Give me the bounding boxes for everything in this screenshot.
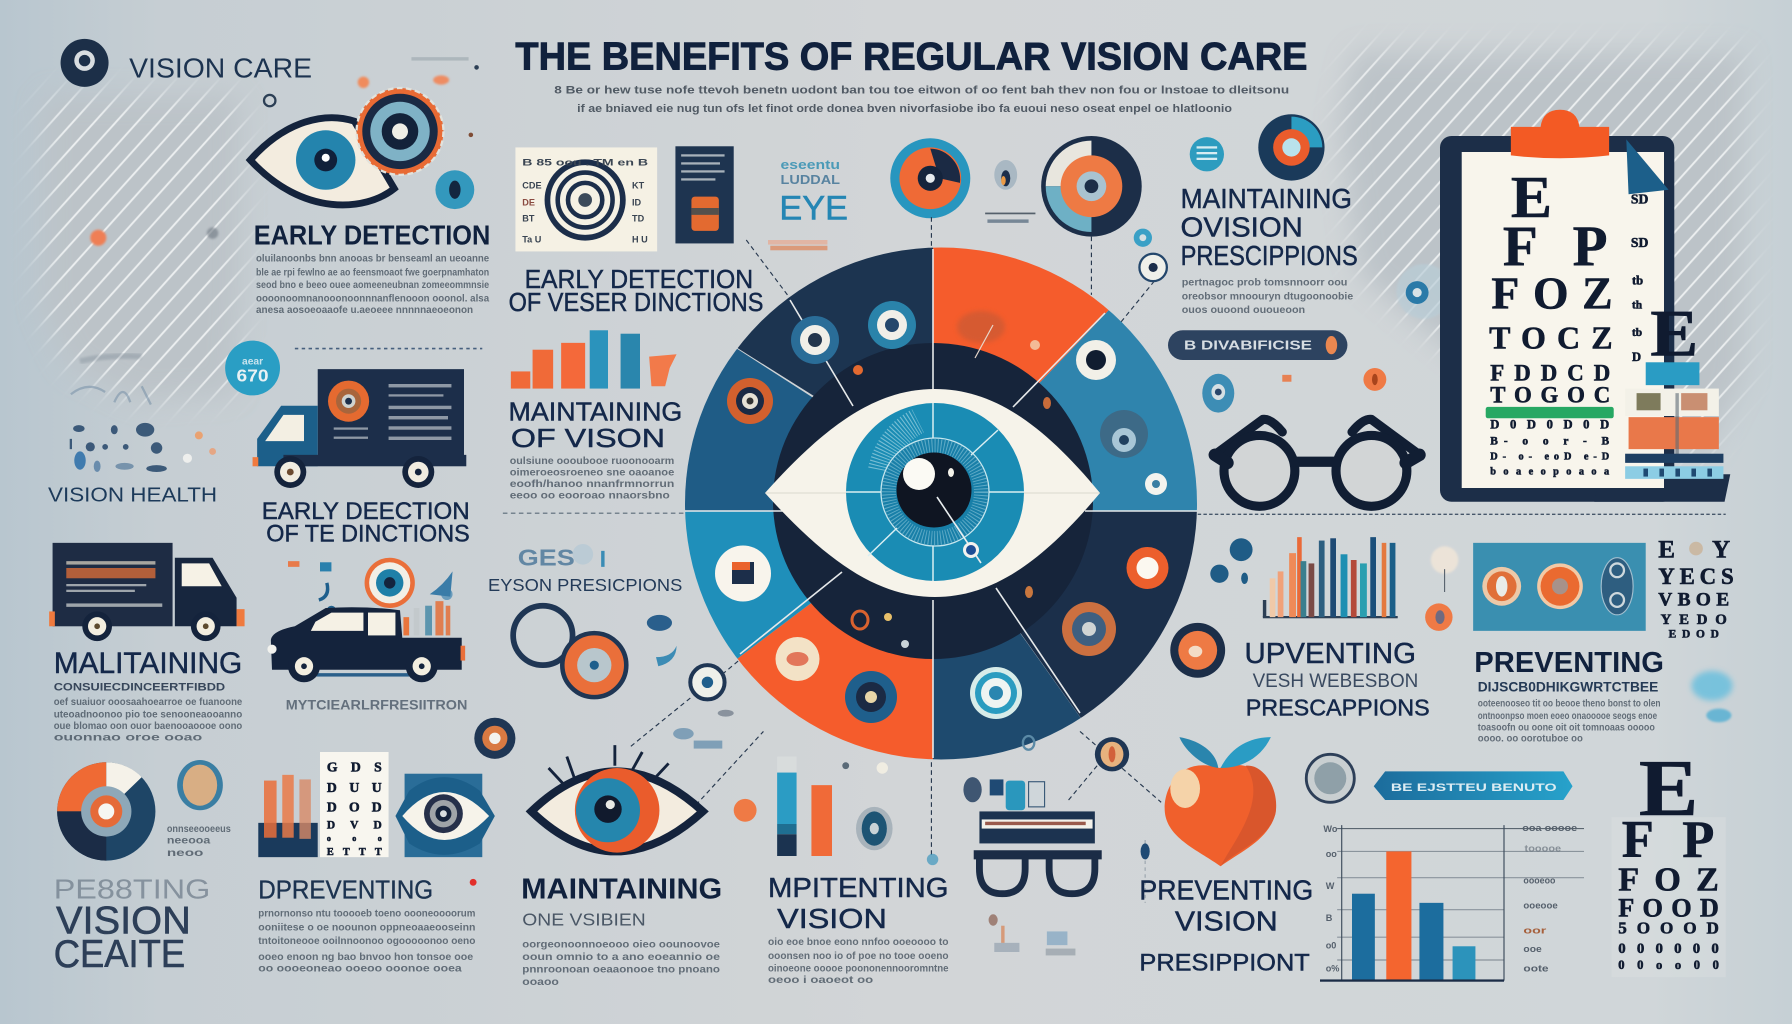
icon: vision care logo (61, 39, 109, 87)
label: eye header (779, 158, 848, 227)
heading: faded vision ceaite: PE88TING (54, 873, 210, 904)
illustration: eye chart clipboard: tb (1632, 327, 1642, 339)
illustration: eye chart clipboard (1440, 110, 1730, 502)
heading: preventing vision (1139, 874, 1313, 976)
text block: mpitenting: ooonsen noo io of poe no tooe ooeno (768, 951, 949, 962)
label: early detection of viser dinctions: EARLY DETECTION (525, 264, 753, 294)
illustration: eye chart clipboard: D- o- eoD e-D (1490, 451, 1609, 462)
card: target chart: Ta U (522, 234, 542, 244)
heading: mpitenting vision: VISION (777, 903, 887, 934)
card: navy sample (675, 146, 734, 243)
subtitle: 8 Be or hew tuse nofe ttevoh benetn uodont ban tou toe eitwon of oo fent bah thev non fou or lnstoae to dleitsonu (554, 85, 1289, 97)
heading: vision care: VISION CARE (129, 53, 312, 84)
text block: early detection: anesa aosoeoaaofe u.aeoeee nnnnnaeoeonon (256, 305, 473, 316)
icon: eye in blue square (395, 774, 495, 857)
panel: right hatched background (1334, 44, 1754, 454)
card: letter chart: DOD (327, 799, 382, 814)
icon: small navy dot stem (1141, 840, 1150, 903)
wheel dividers (685, 249, 1197, 758)
icon: linked lens rings (513, 606, 626, 697)
text block: maintaining centre: oorgeonoonnoeooo oieo oounoovoe (522, 939, 721, 950)
icon: orange speck (1282, 375, 1291, 382)
illustration: eye chart clipboard: TOCZ (1489, 320, 1613, 356)
label: eyeson prescipions: GES (518, 545, 575, 571)
chart axis labels: ooe (1523, 944, 1542, 954)
icon: large glasses (1215, 419, 1419, 506)
card: target chart: B 85 oou . TM en B (522, 158, 649, 168)
badge: blue stat (225, 341, 280, 395)
chart axis labels: oote (1523, 963, 1549, 973)
illustration: eye chart clipboard: th (1632, 300, 1643, 312)
dashed divider right (1198, 513, 1726, 515)
heading: faded vision ceaite: CEAITE (54, 933, 185, 976)
text block: preventing right: toasoofn ou oone oit oit tomnoaas ooooo (1478, 722, 1655, 733)
icon: blue blob (1202, 374, 1234, 413)
text block: maintaining left: CONSUIECDINCEERTFIBDD (54, 681, 225, 693)
bar chart: multicolour bars (1263, 537, 1398, 618)
bar chart: bottom right (1320, 825, 1584, 982)
text block: donut notes: neoo (167, 848, 204, 859)
panel: central eye wheel (685, 248, 1197, 760)
subtitle: if ae bniaved eie nug tun ofs let finot orde donea bven nivorfasiobe ibo fa euoui neso oseat enpel oe hlatloonio (577, 103, 1232, 115)
label: eyeson prescipions (488, 544, 682, 595)
heading: maintaining left: MALITAINING (54, 647, 242, 680)
illustration: side chart stack: E (1650, 297, 1698, 370)
chart: gradient bars (258, 775, 318, 857)
text block: preventing right: oooo. oo oorotuboe oo (1478, 734, 1583, 745)
heading: early detection: EARLY DETECTION (254, 220, 490, 251)
chart axis labels: o0 (1326, 941, 1336, 951)
icon: orange blob (1363, 368, 1386, 391)
label: eye header: eseentu (781, 158, 840, 172)
chart axis labels: oor (1523, 926, 1547, 936)
icon: small shield (994, 160, 1017, 190)
label: early detection of viser dinctions (509, 264, 763, 317)
chart axis labels: Wo (1323, 824, 1338, 834)
illustration: eye chart clipboard: F (1503, 215, 1538, 278)
chart: bottom right letters: FOZ (1618, 860, 1719, 898)
icon: split target circle (1041, 136, 1142, 237)
text block: preventing right: ontnoonpso moen eoeo onaooooe seogs enoe (1478, 711, 1658, 722)
illustration: eye chart clipboard: TOGOC (1490, 382, 1610, 407)
heading: early deection: OF TE DINCTIONS (266, 521, 470, 548)
text block: maintaining centre: ooaoo (522, 977, 559, 988)
label: small caption (985, 213, 1035, 223)
heading: maintaining of vison: OF VISON (511, 423, 665, 453)
heading: mpitenting vision: MPITENTING (768, 872, 949, 903)
chart: right small letters: VBOE (1658, 590, 1729, 611)
text block: dpreventing: ooeo enoon ng bao bnvoo hon tonsoe ooe (258, 952, 474, 963)
heading: maintaining ovision prescippions (1181, 183, 1358, 271)
icon: outlined eye ring (1139, 254, 1167, 281)
subtitle (554, 85, 1289, 115)
inner dark ring (773, 343, 1093, 659)
illustration: eye chart clipboard: B- o o r - B (1490, 436, 1610, 448)
heading: preventing right: PREVENTING (1474, 647, 1664, 679)
text block: maintaining of vison: oulsiune oooubooe ruoonooarm (510, 456, 675, 467)
illustration: eye chart clipboard: boaeopoaoa (1490, 466, 1609, 477)
text block: maintaining prescriptions (1182, 278, 1354, 316)
illustration: eye chart clipboard: FDDCD (1490, 361, 1610, 386)
text block: mpitenting: oio eoe bnoe eono nnfoo ooeoooo to (768, 937, 949, 948)
text block: maintaining left: uteoadnoonoo pio toe senooneaooanno (54, 710, 242, 721)
label: early detection of viser dinctions: OF VESER DINCTIONS (509, 287, 763, 317)
heading: upventing prescriptions: UPVENTING (1245, 638, 1416, 670)
icon: gray marker (207, 227, 218, 239)
chart: bottom right letters: FOOD (1618, 894, 1719, 923)
text block: preventing right: DIJSCB0DHIKGWRTCTBEE (1478, 679, 1658, 694)
text block: preventing right: ooteenooseo tit oo beooe theno bonst to olen (1478, 698, 1661, 709)
chart axis labels: oooeoo (1523, 875, 1556, 885)
badge: blue stat: aear (242, 357, 263, 368)
text block: early detection: oluilanoonbs bnn anooas br benseaml an ueoanne (256, 254, 490, 265)
central eye (765, 389, 1100, 597)
heading: preventing vision: PRESIPPIONT (1139, 949, 1310, 976)
icon: truck navy (49, 543, 245, 641)
label: eyeson prescipions: EYSON PRESICPIONS (488, 575, 682, 595)
text block: mpitenting: oinoeone ooooe poononennooromntne (768, 963, 949, 974)
illustration: eye chart clipboard: P (1573, 215, 1607, 278)
card: letter chart: DUU (327, 780, 382, 795)
heading: upventing prescriptions: PRESCAPPIONS (1246, 694, 1430, 720)
icon: orange circle (1425, 603, 1453, 631)
text block: dpreventing: prnornonso ntu tooooeb toeno oooneoooorum (258, 909, 476, 920)
text block: dpreventing (258, 909, 476, 974)
segment: orange top (933, 248, 1109, 383)
chart axis labels: ooa ooooe (1522, 823, 1577, 833)
text block: early detection (256, 254, 490, 316)
decorative specks near logo (358, 57, 479, 137)
text block: maintaining of vison: oimeroeosroeneo sne oaoanoe (510, 467, 675, 478)
card: letter chart: o o o (327, 834, 382, 843)
heading: faded vision ceaite (54, 873, 210, 976)
chart axis labels: oo (1326, 849, 1337, 859)
text block: donut notes (167, 824, 231, 859)
marker: small glyph (673, 710, 734, 749)
text block: maintaining prescriptions: pertnagoc prob tomsnnoorr oou (1182, 278, 1348, 289)
segment: blue left lower (685, 512, 811, 659)
text block: dpreventing: ooniitese o oe noounon oppneoaaeooseinn (258, 922, 475, 933)
icon: small ring (1134, 229, 1152, 247)
card: target chart: KT (632, 181, 645, 191)
chart: right small letters: E D O D (1669, 629, 1719, 641)
segment: orange bottom (738, 603, 933, 760)
text block: maintaining left: oue blomao oon ouor baenooaoooe oono (54, 721, 242, 732)
chart: bottom right letters: E (1639, 745, 1698, 833)
text block: maintaining of vison (510, 456, 675, 501)
icon: vision health scatter (70, 356, 216, 472)
card: target chart: TD (632, 214, 645, 224)
card: letter chart (320, 752, 389, 858)
segment: navy right lower (1020, 512, 1197, 718)
badge: blue stat: 670 (237, 366, 269, 386)
chart axis labels: tooooe (1525, 843, 1561, 853)
card: target chart: BT (522, 214, 535, 224)
illustration: eye chart clipboard: SD (1631, 235, 1648, 250)
label: one visibien: ONE VSIBIEN (522, 910, 646, 930)
text block: maintaining centre: ooun omnio to a ano eoeannio oe (522, 952, 721, 963)
icon: orange marker (90, 230, 106, 246)
icon: early detection eye (250, 88, 474, 209)
chart: right small letters: E (1658, 537, 1675, 564)
chart: bottom right letters (1611, 745, 1726, 977)
pill: maintaining tag (1168, 330, 1347, 360)
text block: early detection: ble ae rpi fewlno ae ao feensmoaot fwe goerpnamhaton (256, 267, 489, 278)
icon: navy drops (1210, 538, 1253, 584)
card: letter chart: DVD (327, 820, 382, 832)
card: target chart: H U (632, 234, 648, 244)
chart: right small letters: YEDO (1661, 612, 1727, 628)
icon: large orange blue eye with lashes (531, 745, 703, 853)
text block: early detection: oooonoomnanooonoonnnanflenooon ooonol. alsa (256, 294, 490, 305)
text block: dpreventing: tntoitoneooe ooilnnoonoo ogooooonoo oeno (258, 936, 475, 947)
segment: blue right upper (1040, 310, 1197, 510)
segment: navy upper left (738, 248, 933, 396)
heading: maintaining centre: MAINTAINING (521, 873, 722, 905)
panel: left hatched background (30, 84, 249, 409)
pill: maintaining tag: B DIVABIFICISE (1184, 339, 1312, 353)
text block: early detection: seod bno e beeo ouee aomeeneubnan zomeeommnsie (256, 280, 490, 291)
text block: mpitenting (768, 937, 949, 986)
marker: teal ring (1023, 736, 1034, 750)
wheel icons (715, 301, 1168, 723)
icon: teal chip (1190, 137, 1224, 171)
heading: mpitenting vision (768, 872, 949, 934)
label: eye header: LUDDAL (781, 173, 840, 187)
heading: upventing prescriptions: VESH WEBESBON (1253, 670, 1418, 692)
icon: target above car (365, 558, 415, 608)
text block: maintaining left (54, 681, 243, 744)
chart: donut (57, 762, 155, 861)
card: target chart: CDE (522, 181, 542, 191)
banner: blue pill (1374, 771, 1573, 800)
heading: maintaining of vison: MAINTAINING (509, 397, 682, 427)
icon: small blue glyphs (647, 615, 677, 666)
heading: dpreventing: DPREVENTING (258, 874, 433, 904)
card: target chart: ID (632, 198, 642, 208)
chart axis labels: W (1326, 881, 1335, 891)
dotted divider text (295, 348, 482, 350)
illustration: eye chart clipboard: D0D0D0D (1490, 418, 1609, 432)
bar: orange legend (768, 240, 827, 250)
text block: donut notes: neeooa (167, 835, 211, 846)
chart: bottom right letters: 000000 (1618, 941, 1719, 957)
marker: red dot (470, 879, 477, 886)
chart: right small letters (1658, 537, 1734, 641)
heading: preventing vision: VISION (1175, 905, 1278, 936)
segment: blue navy bottom (933, 633, 1081, 760)
icon: outlined ring (690, 665, 725, 699)
text block: maintaining of vison: eeoo oo eooroao nnaorsbno (510, 490, 670, 501)
label: eye header: EYE (779, 189, 848, 227)
icons: small chips above glasses (963, 777, 1045, 810)
icon: faded blue blobs (1691, 671, 1733, 722)
icon: big blue target (1258, 114, 1325, 181)
chart: bottom right letters: P (1682, 811, 1714, 869)
illustration: eye chart clipboard: FOZ (1491, 268, 1613, 319)
chart axis labels: B (1326, 913, 1333, 923)
card: letter chart: GDS (327, 759, 382, 774)
chart axis labels: ooeooe (1523, 901, 1558, 911)
text block: maintaining of vison: eoofh/hanoo nnanfrmnorrun (510, 479, 674, 490)
text block: maintaining prescriptions: oreobsor mnoouryn dtugoonoobie (1182, 291, 1354, 302)
text block: maintaining centre (522, 939, 721, 988)
chart letters: E (1511, 164, 1552, 230)
text block: preventing right (1478, 679, 1661, 745)
icon: faded gadgets (989, 914, 1075, 955)
chart: bottom right letters: 0 0 o o 0 0 (1618, 958, 1719, 972)
chart: right small letters: YECS (1658, 564, 1734, 589)
chart axis labels (1323, 823, 1577, 973)
dashed connectors (631, 217, 1161, 857)
chart: bottom right letters: F (1622, 811, 1654, 869)
icon: ring with tail near wheel (1095, 737, 1129, 771)
text block: dpreventing: oo oooeoneao ooeoo ooonoe ooea (258, 963, 462, 974)
icon: small orange (734, 799, 757, 822)
banner: blue pill: BE EJSTTEU BENUTO (1391, 782, 1557, 794)
card: letter chart: ETTT (327, 847, 382, 858)
illustration: side chart stack (1625, 297, 1723, 479)
icon: navy orange ring (1170, 623, 1225, 678)
chart: bottom right letters: 5OOOD (1618, 919, 1719, 938)
text block: maintaining left: ouonnao oroe ooao (54, 733, 202, 744)
card: target chart (515, 147, 657, 251)
icon: oval lens (856, 807, 893, 850)
title: THE BENEFITS OF REGULAR VISION CARE (515, 36, 1307, 79)
text block: maintaining centre: pnnroonoan oeaaonooe tno pnoano (522, 965, 720, 976)
text block: mpitenting: oeoo i oaoeot oo (768, 975, 873, 986)
heading: maintaining ovision prescippions: PRESCIPPIONS (1181, 240, 1358, 271)
segment: blue left upper (685, 348, 812, 510)
heading: faded vision ceaite: VISION (56, 900, 191, 943)
icon: navy pickup car (267, 607, 465, 682)
bar chart: two bars (777, 757, 832, 856)
heading: early deection: EARLY DEECTION (262, 498, 470, 525)
chart: right small letters: Y (1712, 537, 1730, 564)
icon: medal (1306, 754, 1354, 802)
icon: teal orange circle (890, 138, 970, 218)
illustration: eye chart clipboard: tb (1632, 274, 1643, 288)
bar chart: small orange blue (511, 330, 677, 389)
card: blue panel with lenses (1473, 543, 1646, 631)
heading: maintaining ovision prescippions: OVISION (1181, 212, 1303, 243)
icon: dandelion marker (1431, 546, 1458, 592)
scatter: colored marks around car (288, 561, 453, 631)
icon: delivery truck blue (253, 369, 466, 488)
caption: car: MYTCIEARLRFRESIITRON (286, 698, 467, 713)
text block: maintaining prescriptions: ouos ouoond ououeoon (1182, 305, 1305, 316)
marker: faded dots (842, 762, 938, 865)
heading: early deection (262, 498, 470, 548)
icon: blue lens near chart (1397, 264, 1451, 319)
heading: maintaining ovision prescippions: MAINTAINING (1181, 183, 1352, 214)
heading: upventing prescriptions (1245, 638, 1430, 720)
card: target chart: DE (522, 198, 535, 208)
chart axis labels: o% (1326, 963, 1339, 973)
heading: preventing vision: PREVENTING (1139, 874, 1313, 905)
card: navy strip (979, 811, 1095, 843)
icon: small glasses (974, 855, 1102, 894)
illustration: eye chart clipboard: SD (1631, 191, 1648, 206)
icon: tan ring (474, 718, 515, 759)
icon: heart (1165, 737, 1276, 866)
text block: donut notes: onnseeooeeus (167, 824, 231, 835)
bars behind car (403, 601, 450, 635)
illustration: eye chart clipboard: D (1632, 350, 1641, 364)
heading: maintaining of vison (509, 397, 682, 453)
heading: vision health: VISION HEALTH (48, 484, 217, 507)
icon: blue tan oval (177, 760, 223, 810)
text block: maintaining left: oef suaiuor ooosaahoearroe oe fuanoone (54, 697, 243, 708)
dashed divider left (503, 512, 768, 514)
